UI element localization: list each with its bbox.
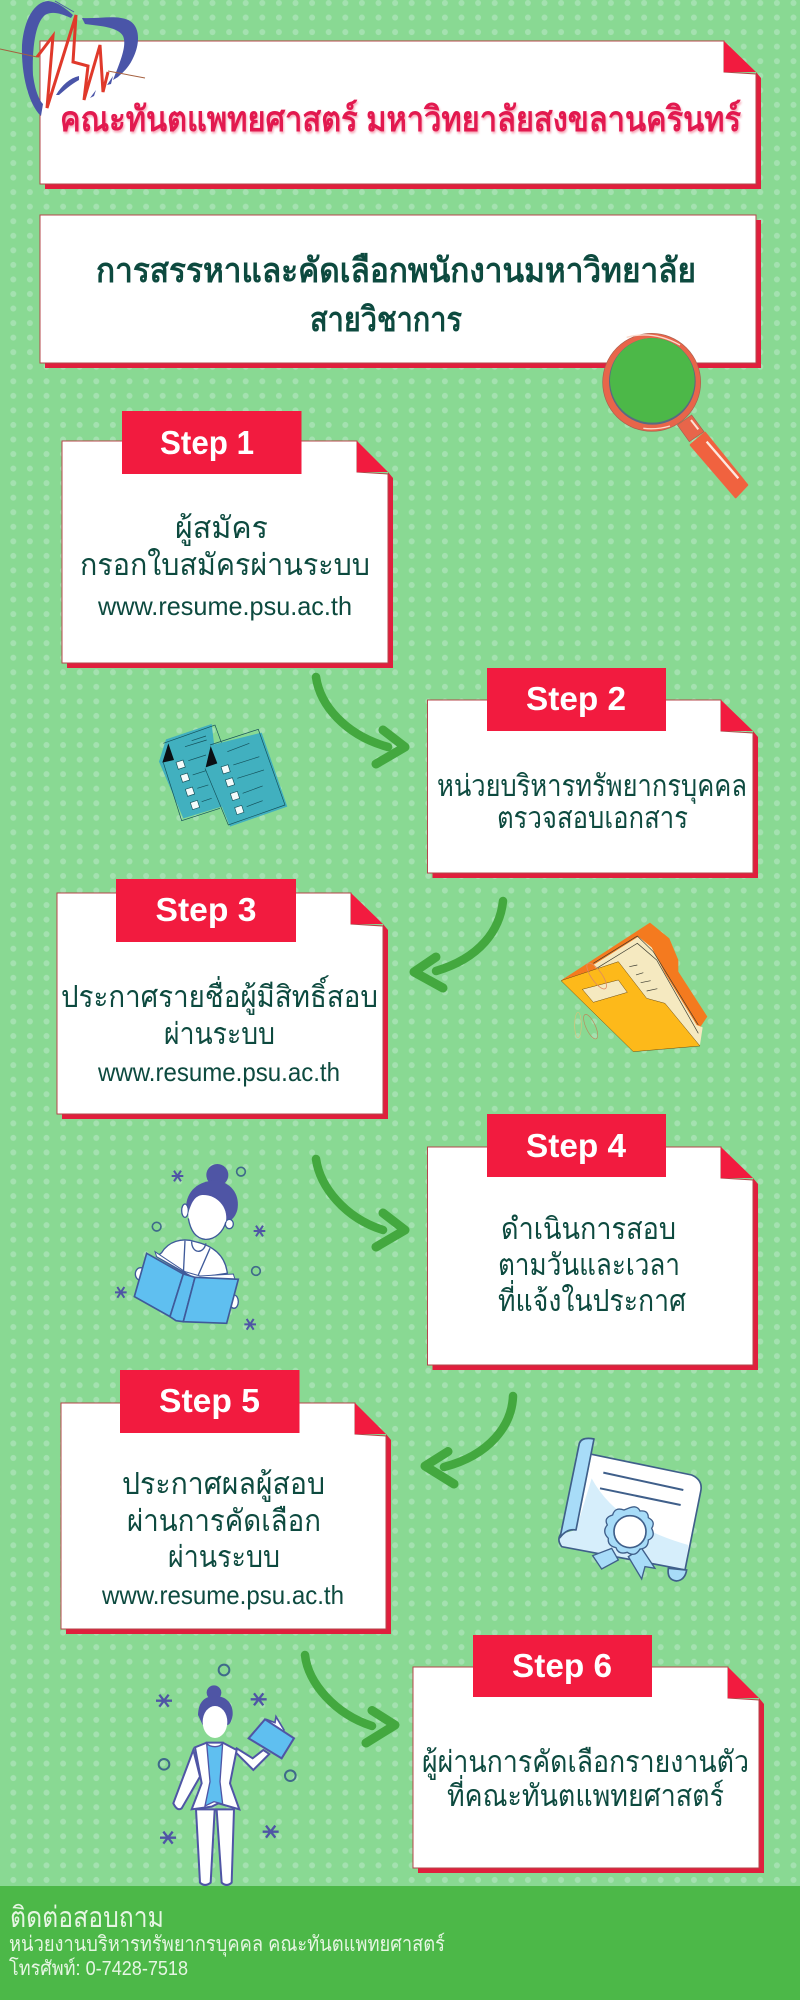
footer: contact band <box>0 1886 800 2000</box>
panel: main title box <box>40 215 761 368</box>
step 1 description: กรอกใบสมัครผ่านระบบ <box>80 548 370 582</box>
icon: standing woman with folder <box>156 1665 296 1885</box>
icon: magnifying glass <box>603 333 747 497</box>
step 1 tab <box>122 411 302 474</box>
contact phone: โทรศัพท์: 0-7428-7518 <box>9 1957 188 1980</box>
step 1 tab: Step 1 <box>160 424 254 461</box>
icon: certificate scroll <box>559 1438 701 1581</box>
heading: main title: สายวิชาการ <box>310 301 463 339</box>
step 4 tab <box>487 1114 666 1177</box>
step 3 description <box>61 975 378 1087</box>
step 6 tab: Step 6 <box>512 1647 612 1684</box>
step 4 tab: Step 4 <box>526 1127 627 1164</box>
step 3 tab: Step 3 <box>156 891 256 928</box>
step 2 description: ตรวจสอบเอกสาร <box>497 802 688 835</box>
icon: checklist documents <box>159 724 287 827</box>
step 3 description: ประกาศรายชื่อผู้มีสิทธิ์สอบ <box>61 975 378 1015</box>
step 5 description <box>101 1468 344 1610</box>
icon: dental faculty logo <box>0 1 145 116</box>
arrow: step 1 to step 2 <box>316 677 405 764</box>
arrow: step 5 to step 6 <box>305 1655 395 1743</box>
step 2 description: หน่วยบริหารทรัพยากรบุคคล <box>437 770 747 805</box>
step 1 description: ผู้สมัคร <box>175 512 268 546</box>
icon: person reading book <box>115 1164 265 1330</box>
panel: step 4 <box>428 1114 758 1370</box>
step 6 tab <box>473 1635 652 1697</box>
step 5 tab <box>120 1370 300 1433</box>
icon: yellow folder <box>561 923 707 1052</box>
contact heading: ติดต่อสอบถาม <box>10 1902 164 1934</box>
step 5 description: www.resume.psu.ac.th <box>101 1580 344 1610</box>
arrow: step 2 to step 3 <box>414 901 503 988</box>
arrow: step 4 to step 5 <box>425 1396 513 1484</box>
step 4 description: ตามวันและเวลา <box>498 1249 680 1282</box>
step 1 description: www.resume.psu.ac.th <box>97 591 352 621</box>
heading: main title <box>96 252 696 339</box>
panel: step 3 <box>57 879 388 1119</box>
arrow: step 3 to step 4 <box>316 1159 405 1247</box>
step 4 description: ดำเนินการสอบ <box>501 1213 676 1246</box>
step 4 description <box>498 1213 686 1318</box>
panel: step 1 <box>62 411 393 668</box>
step 1 description <box>80 512 370 621</box>
step 3 description: ผ่านระบบ <box>164 1018 275 1051</box>
step 3 description: www.resume.psu.ac.th <box>97 1057 340 1087</box>
step 2 tab <box>487 668 666 731</box>
step 5 description: ประกาศผลผู้สอบ <box>122 1468 325 1502</box>
step 3 tab <box>116 879 296 942</box>
step 6 description: ที่คณะทันตแพทยศาสตร์ <box>447 1775 724 1813</box>
step 5 tab: Step 5 <box>159 1382 260 1419</box>
panel: step 6 <box>413 1635 764 1873</box>
step 6 description: ผู้ผ่านการคัดเลือกรายงานตัว <box>422 1746 749 1780</box>
step 5 description: ผ่านการคัดเลือก <box>127 1505 321 1538</box>
panel: step 5 <box>61 1370 391 1634</box>
step 4 description: ที่แจ้งในประกาศ <box>498 1280 686 1318</box>
panel: step 2 <box>428 668 758 878</box>
step 2 description <box>437 770 747 835</box>
heading: main title: การสรรหาและคัดเลือกพนักงานมหาวิทยาลัย <box>96 252 696 290</box>
step 6 description <box>422 1746 749 1813</box>
step 2 tab: Step 2 <box>526 680 626 717</box>
step 5 description: ผ่านระบบ <box>168 1541 280 1574</box>
contact unit: หน่วยงานบริหารทรัพยากรบุคคล คณะทันตแพทยศาสตร์ <box>9 1932 445 1957</box>
panel: faculty title box <box>40 41 761 189</box>
